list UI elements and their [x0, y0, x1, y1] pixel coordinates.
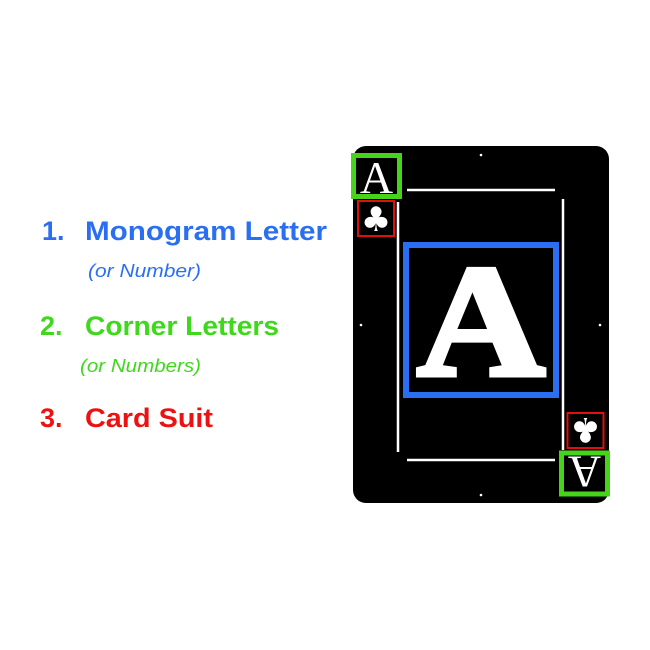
legend item 1: monogram letter [42, 216, 328, 281]
legend item 3: card suit [40, 403, 213, 433]
legend item 2: corner letters: (or Numbers) [80, 356, 201, 376]
legend item 1: monogram letter: Monogram Letter [85, 216, 328, 246]
legend item 2: corner letters: 2. [40, 311, 63, 341]
legend item 2: corner letters [40, 311, 279, 376]
legend item 1: monogram letter: (or Number) [88, 261, 201, 281]
legend item 2: corner letters: Corner Letters [85, 311, 279, 341]
frame lines [398, 190, 563, 460]
legend item 3: card suit: Card Suit [85, 403, 213, 433]
playing card [353, 146, 609, 503]
monogram letter with blue box: A [417, 232, 545, 410]
corner letter bottom-right: A [568, 446, 601, 498]
suit top-left: ♣ [361, 200, 391, 240]
suit bottom-right: ♣ [570, 409, 601, 449]
legend item 3: card suit: 3. [40, 403, 63, 433]
legend item 1: monogram letter: 1. [42, 216, 65, 246]
corner letter top-left: A [360, 152, 393, 203]
card border dots [360, 154, 601, 496]
